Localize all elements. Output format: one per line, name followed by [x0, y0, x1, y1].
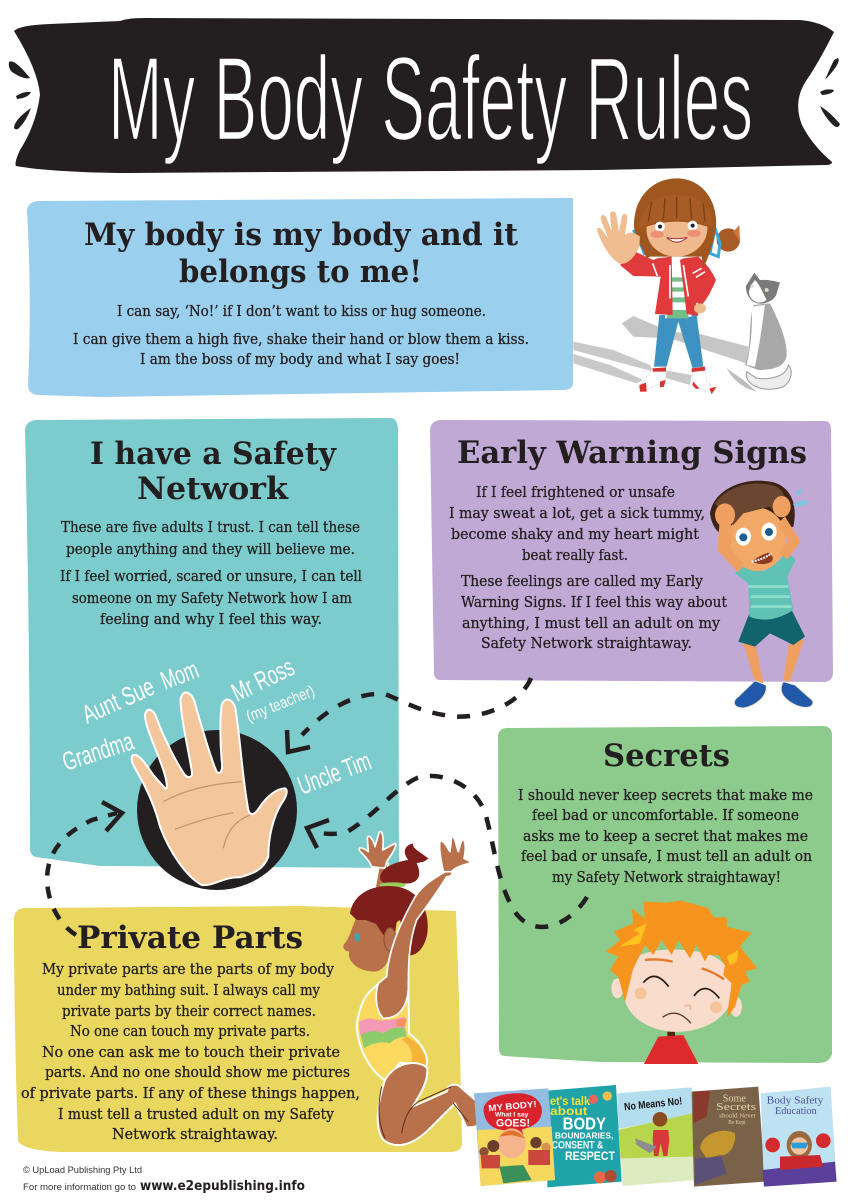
text: warning signs: anything, I must tell an adult on my [462, 616, 721, 632]
jacket [620, 252, 716, 316]
shirt [665, 270, 692, 318]
book: body boundaries: CONSENT & [552, 1140, 604, 1152]
hands [715, 503, 735, 527]
face [647, 222, 707, 257]
face details [645, 959, 724, 979]
book: no means no: No Means No! [624, 1095, 683, 1113]
jeans [654, 315, 703, 368]
books [474, 1085, 837, 1187]
head [729, 508, 786, 571]
book: body safety education: Education [775, 1106, 817, 1117]
eyes and mouth [736, 528, 751, 546]
heading: safety network: Network [137, 471, 290, 507]
hair [606, 901, 757, 1018]
panel: early warning signs [430, 420, 833, 682]
book: body boundaries: BOUNDARIES, [555, 1130, 613, 1140]
leg [378, 1063, 487, 1145]
shorts [738, 610, 805, 647]
text: warning signs: Safety Network straightaway. [481, 636, 692, 652]
text: warning signs: become shaky and my heart might [451, 527, 699, 543]
book: body safety education: Body Safety [767, 1095, 823, 1106]
text: warning signs: I may sweat a lot, get a sick tummy, [449, 506, 705, 522]
book: body boundaries: about [550, 1104, 587, 1118]
text: private parts: Network straightaway. [112, 1127, 278, 1143]
heading: private parts: Private Parts [77, 920, 303, 956]
arms [717, 517, 744, 573]
hand right [440, 837, 471, 872]
text: body rules: I am the boss of my body and what I say goes! [140, 352, 460, 368]
heading: safety network [90, 436, 337, 507]
text: secrets [518, 788, 813, 886]
labels: safety network names: Uncle Tim [293, 745, 375, 801]
footer: copyright and web address [23, 1165, 305, 1194]
text: warning signs [449, 485, 727, 652]
icon: hand in black circle [132, 692, 297, 890]
labels: safety network names: (my teacher) [244, 683, 317, 726]
shirt [735, 550, 796, 620]
text: private parts: My private parts are the parts of my body [42, 962, 335, 978]
book: body boundaries: RESPECT [565, 1149, 616, 1163]
book: body safety education [761, 1087, 837, 1187]
socks [639, 367, 716, 394]
heading: my body: My body is my body and it [84, 217, 519, 253]
labels: safety network names [59, 651, 375, 801]
heading: safety network: I have a Safety [90, 436, 337, 472]
text: private parts: No one can touch my private parts. [70, 1024, 310, 1040]
text: private parts: parts. And no one should show me pictures [45, 1065, 350, 1081]
text: safety network: These are five adults I trust. I can tell these [61, 520, 360, 536]
text: secrets: feel bad or unsafe, I must tell an adult on [521, 849, 812, 865]
hair bun [380, 843, 428, 884]
arrow: secrets to hand [307, 776, 587, 927]
heading: early warning signs: Early Warning Signs [457, 435, 807, 471]
text: body rules [73, 304, 529, 368]
text: private parts: under my bathing suit. I always call my [57, 983, 321, 999]
panel: secrets [498, 726, 832, 1063]
text: secrets: I should never keep secrets that make me [518, 788, 813, 804]
hair back [350, 886, 428, 955]
book: my body what I say goes: MY BODY! [488, 1099, 537, 1113]
text: warning signs: beat really fast. [522, 548, 628, 564]
body [644, 1035, 698, 1064]
arrow: private parts to hand [47, 802, 122, 935]
book: my body what I say goes: GOES! [496, 1118, 530, 1130]
text: private parts: No one can ask me to touch their private [42, 1045, 340, 1061]
heading: belongs to me: belongs to me! [179, 254, 422, 290]
labels: safety network names: Mom [156, 654, 203, 696]
text: safety network: feeling and why I feel this way. [100, 612, 322, 628]
head [623, 949, 733, 1032]
labels: safety network names: Grandma [59, 726, 138, 777]
text: secrets: asks me to keep a secret that makes me [523, 829, 808, 845]
text: body rules: I can give them a high five, shake their hand or blow them a kiss. [73, 332, 529, 348]
illustration: girl with cat [573, 178, 791, 394]
ponytails [717, 228, 740, 252]
text: warning signs: These feelings are called my Early [461, 574, 704, 590]
text: safety network [60, 520, 362, 628]
footer: copyright and web address: www.e2epublishing.info [140, 1178, 305, 1194]
arm [376, 870, 452, 1018]
sweat drops [793, 488, 809, 506]
text: safety network: someone on my Safety Network how I am [72, 591, 352, 607]
text: private parts: of private parts. If any of these things happen, [21, 1086, 360, 1102]
book: some secrets: Be Kept [728, 1119, 746, 1126]
labels: safety network names: Aunt Sue [77, 671, 159, 729]
text: private parts: I must tell a trusted adult on my Safety [58, 1107, 335, 1123]
cat [745, 303, 787, 370]
book: some secrets: Secrets [716, 1102, 756, 1113]
footer: copyright and web address: © UpLoad Publishing Pty Ltd [23, 1165, 142, 1176]
back arm [375, 860, 388, 888]
text: secrets: my Safety Network straightaway! [552, 870, 781, 886]
illustration: jumping girl [343, 831, 487, 1145]
hair back [710, 481, 795, 547]
panel: body belongs to me [27, 198, 573, 397]
panel: safety network [25, 418, 399, 868]
hair [634, 178, 716, 268]
swimsuit [357, 977, 427, 1081]
shoes [734, 681, 766, 708]
illustration: scared boy [710, 481, 813, 708]
book: my body what I say goes: What I say [495, 1112, 529, 1119]
arrow: warning signs to hand [287, 678, 531, 752]
text: safety network: people anything and they will believe me. [66, 542, 355, 558]
legs [743, 637, 804, 685]
text: warning signs: If I feel frightened or unsafe [476, 485, 675, 501]
labels: safety network names: Mr Ross [226, 651, 299, 707]
book: some secrets: should Never [719, 1113, 756, 1119]
text: safety network: If I feel worried, scared or unsure, I can tell [60, 569, 362, 585]
book: body boundaries: BODY [563, 1113, 606, 1133]
text: private parts: private parts by their correct names. [62, 1004, 316, 1020]
text: body rules: I can say, ‘No!’ if I don’t want to kiss or hug someone. [117, 304, 486, 320]
title banner [9, 18, 840, 173]
raised hand [597, 211, 640, 264]
ears [611, 978, 623, 998]
book: body boundaries: et's talk [550, 1094, 590, 1108]
footer: copyright and web address: For more information go to [23, 1182, 136, 1193]
heading: secrets: Secrets [603, 738, 730, 774]
book: some secrets [692, 1087, 765, 1187]
text: secrets: feel bad or uncomfortable. If someone [532, 808, 799, 824]
shadows [622, 316, 748, 363]
book: my body what I say goes [474, 1088, 555, 1186]
book: no means no [617, 1087, 697, 1186]
text: warning signs: Warning Signs. If I feel this way about [461, 595, 727, 611]
book: body boundaries [547, 1085, 622, 1187]
hand left [359, 831, 396, 868]
book: some secrets: Some [723, 1094, 746, 1105]
head [343, 917, 393, 972]
illustration: sad boy [606, 901, 757, 1064]
text: private parts [21, 962, 360, 1143]
panel: private parts [14, 906, 462, 1152]
